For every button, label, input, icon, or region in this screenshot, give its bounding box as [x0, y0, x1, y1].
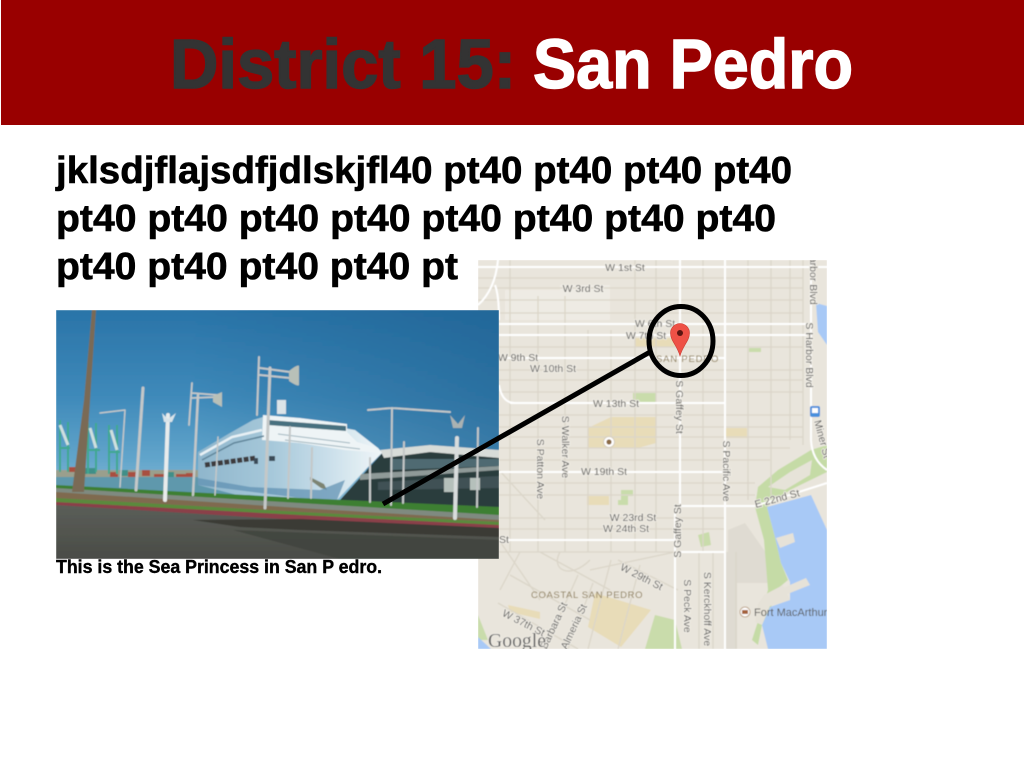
- lamp posts: [100, 357, 478, 518]
- harbor cranes: [60, 420, 120, 474]
- street labels: W 23rd St: [610, 512, 656, 524]
- street labels: W 7th St: [626, 330, 666, 342]
- street labels: Fort MacArthur S: [754, 607, 838, 619]
- body text block: jklsdjflajsdfjdlskjfl40 pt40 pt40 pt40 pt40: [55, 150, 792, 192]
- street labels: W 24th St: [603, 523, 649, 535]
- body text block: pt40 pt40 pt40 pt40 pt40 pt40 pt40 pt40: [56, 198, 776, 240]
- street labels: S Patton Ave: [534, 439, 546, 499]
- street labels: [498, 239, 838, 651]
- street labels: S Pacific Ave: [720, 440, 732, 502]
- street labels: S Harbor Blvd: [803, 322, 815, 388]
- terminal building: [340, 445, 499, 512]
- icon: school: [604, 436, 614, 448]
- container yard: [56, 466, 198, 478]
- street labels: COASTAL SAN PEDRO: [531, 590, 643, 601]
- highlight circle around San Pedro: [649, 306, 713, 376]
- street labels: W 10th St: [530, 363, 576, 375]
- lighter blocks: [505, 285, 610, 320]
- lamp reflectors: [162, 366, 465, 428]
- street labels: Almeria St: [559, 602, 590, 651]
- street labels: W 1st St: [605, 262, 645, 274]
- cruise ship hull: [198, 400, 382, 500]
- street labels: S Gaffey St: [673, 380, 685, 434]
- street labels: S Peck Ave: [681, 579, 693, 633]
- body text block: [55, 150, 792, 288]
- street labels: W 3rd St: [563, 283, 604, 295]
- harbor water: [56, 476, 234, 495]
- sky darker right: [271, 310, 499, 470]
- street map of San Pedro: [478, 239, 838, 652]
- park: [752, 445, 827, 645]
- street labels: Miner St: [811, 419, 833, 460]
- Google logo: Google: [488, 630, 546, 652]
- title: San Pedro: [533, 25, 853, 103]
- street labels: W 6th St: [635, 318, 675, 330]
- ground: [56, 485, 499, 559]
- street labels: W 37th St: [500, 608, 547, 639]
- ship superstructure: [262, 415, 382, 453]
- photo caption: This is the Sea Princess in San P edro.: [56, 557, 382, 577]
- water: [478, 303, 827, 649]
- street labels: E 22nd St: [753, 487, 801, 511]
- street labels: S Gaffey St: [672, 504, 684, 558]
- land use areas: [478, 338, 771, 649]
- street labels: W 9th St: [498, 352, 538, 364]
- major roads: [478, 260, 827, 649]
- street labels: W 29th St: [618, 562, 665, 593]
- icon: map pin: [670, 324, 690, 356]
- street labels: S Walker Ave: [559, 416, 571, 478]
- title: [170, 25, 853, 103]
- icon: transit: [810, 406, 820, 417]
- street labels: W 13th St: [593, 398, 639, 410]
- title: District 15:: [170, 25, 516, 103]
- street labels: St: [499, 534, 509, 546]
- icon: museum: [740, 607, 750, 617]
- street labels: S Kerckhoff Ave: [701, 572, 713, 646]
- palm tree: [72, 310, 96, 492]
- photo: Sea Princess at San Pedro: [56, 310, 499, 559]
- street labels: W 19th St: [581, 466, 627, 478]
- piers: [755, 533, 810, 625]
- header band: [1, 0, 1024, 125]
- body text block: pt40 pt40 pt40 pt40 pt: [56, 246, 458, 288]
- minor street grid: [478, 260, 803, 649]
- connector line from photo to map pin: [383, 352, 650, 504]
- street labels: Barbara St: [538, 600, 570, 651]
- street labels: SAN PEDRO: [656, 354, 719, 365]
- street labels: S Harbor Blvd: [807, 239, 819, 305]
